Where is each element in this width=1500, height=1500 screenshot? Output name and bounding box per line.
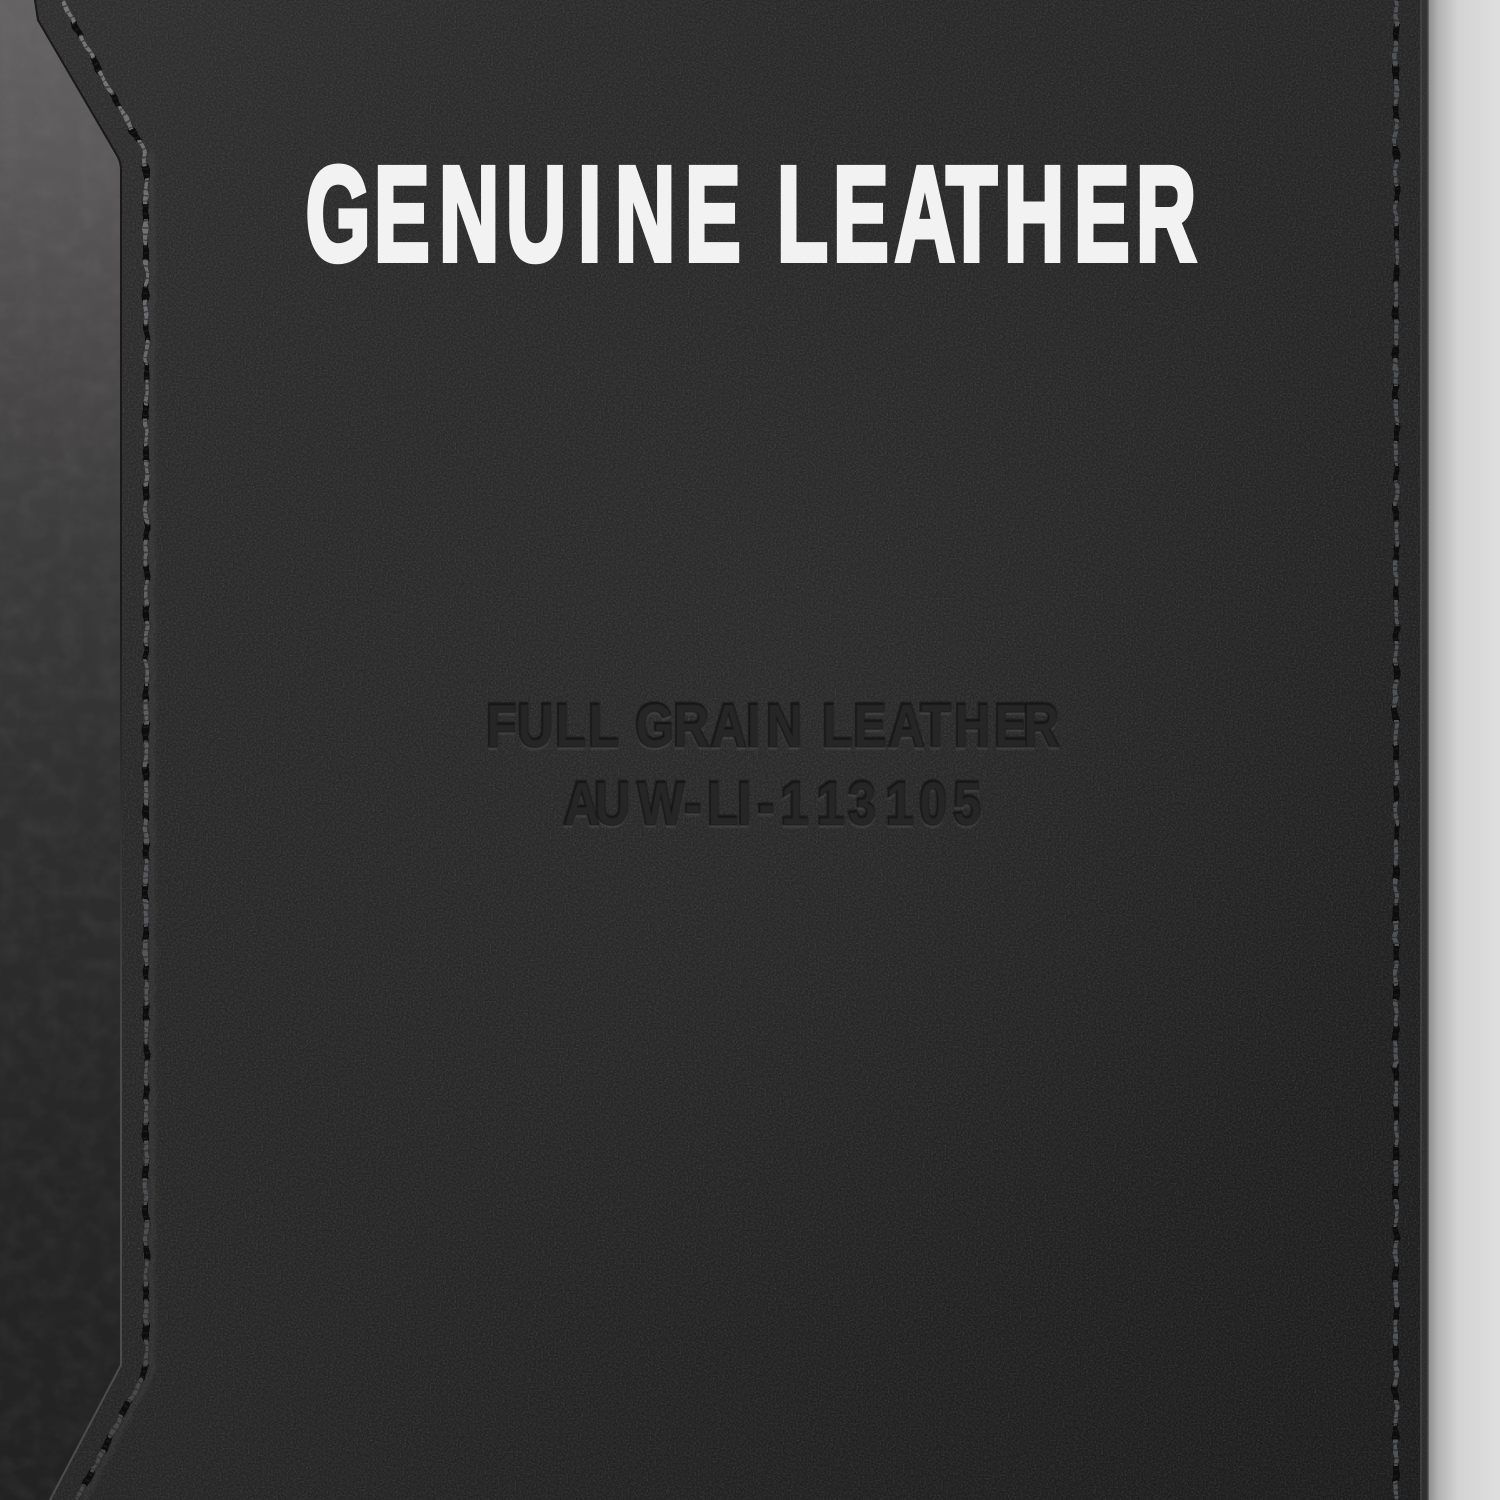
embossed line: product code: AUW-LI-113105 [564, 770, 981, 837]
inner pocket panel at left [0, 0, 140, 1500]
embossed line: full grain leather: FULL GRAIN LEATHER [486, 691, 1059, 759]
title: GENUINE LEATHER [306, 139, 1196, 289]
background wall at right [1428, 0, 1500, 1500]
left stitching [63, 0, 152, 1500]
embossed line: full grain leather: FULL GRAIN LEATHER [486, 693, 1059, 761]
embossed line: product code: AUW-LI-113105 [563, 769, 980, 837]
embossed line: product code: AUW-LI-113105 [563, 771, 980, 839]
right stitching [1393, 0, 1399, 1500]
embossed line: full grain leather: FULL GRAIN LEATHER [487, 692, 1059, 759]
embossed text [486, 691, 1059, 839]
